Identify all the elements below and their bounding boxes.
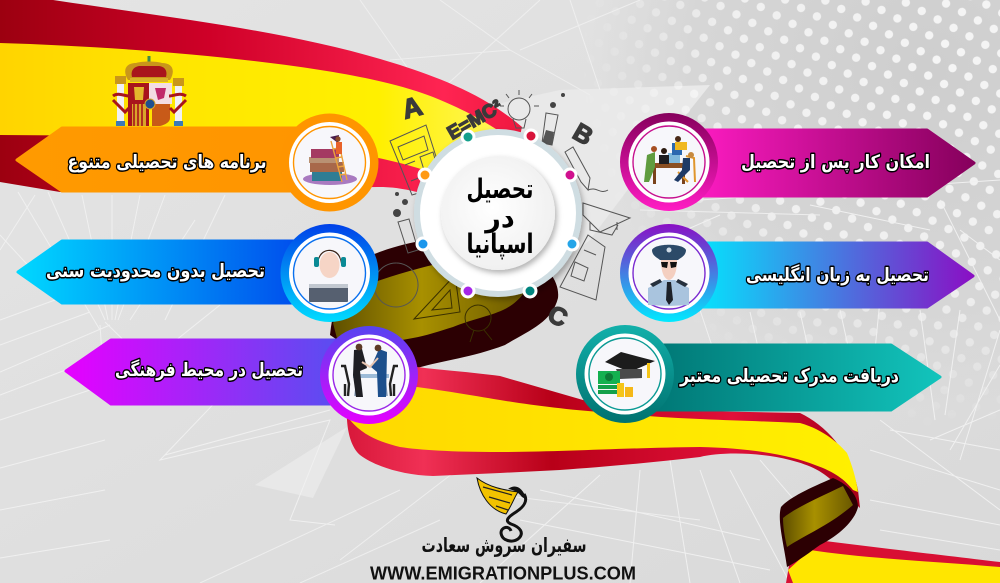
logo name: سفیران سروش سعادت bbox=[422, 533, 586, 557]
doodle: calculators bbox=[390, 125, 605, 300]
arrow banner bbox=[66, 340, 345, 404]
item: cultural environment bbox=[66, 326, 418, 424]
label: برنامه های تحصیلی متنوع bbox=[68, 152, 266, 173]
logo bbox=[370, 478, 636, 583]
hub title bbox=[466, 174, 534, 260]
icon: books and ladder bbox=[303, 135, 357, 185]
arrow banner bbox=[650, 345, 940, 410]
item: no age limit bbox=[18, 224, 378, 322]
item: accredited degree bbox=[576, 325, 940, 423]
medallion bbox=[620, 224, 718, 322]
label: امکان کار پس از تحصیل bbox=[741, 152, 930, 173]
icon: headset operator bbox=[309, 250, 348, 302]
hub inner disc bbox=[441, 156, 555, 270]
doodle: rulers on dark fold bbox=[374, 263, 492, 342]
doodle: light bulb bbox=[500, 90, 539, 128]
arrow banner bbox=[18, 241, 310, 303]
doodle: letter B: B bbox=[568, 118, 598, 151]
item: work after study bbox=[620, 113, 974, 211]
item: varied study programs bbox=[17, 114, 378, 212]
icon: handshake at table bbox=[341, 344, 398, 397]
hub ring bbox=[414, 129, 582, 297]
arrow banner bbox=[17, 128, 310, 191]
label: تحصیل در محیط فرهنگی bbox=[115, 359, 303, 381]
hub title: اسپانیا bbox=[466, 229, 534, 260]
flag ribbon: lower band bbox=[347, 367, 860, 508]
website: WWW.EMIGRATIONPLUS.COM bbox=[370, 562, 636, 583]
arrow banner bbox=[690, 243, 973, 307]
doodle: test tubes bbox=[393, 93, 565, 253]
pillars bbox=[113, 76, 186, 126]
arrow banner bbox=[690, 130, 974, 196]
crown bbox=[125, 56, 173, 82]
icon: officer bbox=[648, 245, 689, 306]
icon: cap, cash and coins bbox=[598, 352, 655, 397]
flag ribbon: tail fold bbox=[780, 478, 1000, 583]
logo mark: winged bird bbox=[477, 478, 527, 541]
hub coloured dots bbox=[417, 130, 578, 297]
hub title: تحصیل bbox=[466, 174, 534, 205]
doodle: letter C: C bbox=[543, 300, 572, 333]
medallion bbox=[620, 113, 718, 211]
Spanish coat of arms bbox=[113, 56, 186, 126]
doodle: pencil and graduation cap bbox=[565, 147, 630, 235]
flag ribbon: top band bbox=[0, 0, 522, 200]
label: تحصیل به زبان انگلیسی bbox=[746, 264, 929, 286]
hub title: در bbox=[483, 203, 515, 234]
centre hub bbox=[414, 129, 582, 297]
education doodles around the centre bbox=[374, 90, 630, 342]
label: دریافت مدرک تحصیلی معتبر bbox=[679, 366, 899, 387]
flag ribbon: dark fold behind centre bbox=[330, 240, 558, 372]
icon: team at table bbox=[644, 136, 695, 184]
medallion bbox=[280, 224, 378, 322]
item: study in English bbox=[620, 224, 973, 322]
label: تحصیل بدون محدودیت سنی bbox=[46, 261, 265, 282]
medallion bbox=[576, 325, 674, 423]
shield bbox=[128, 83, 172, 126]
medallion bbox=[280, 114, 378, 212]
doodle: letter A: A bbox=[399, 91, 425, 125]
medallion bbox=[320, 326, 418, 424]
doodle: formula E=MC2: E=MC² bbox=[444, 96, 506, 144]
